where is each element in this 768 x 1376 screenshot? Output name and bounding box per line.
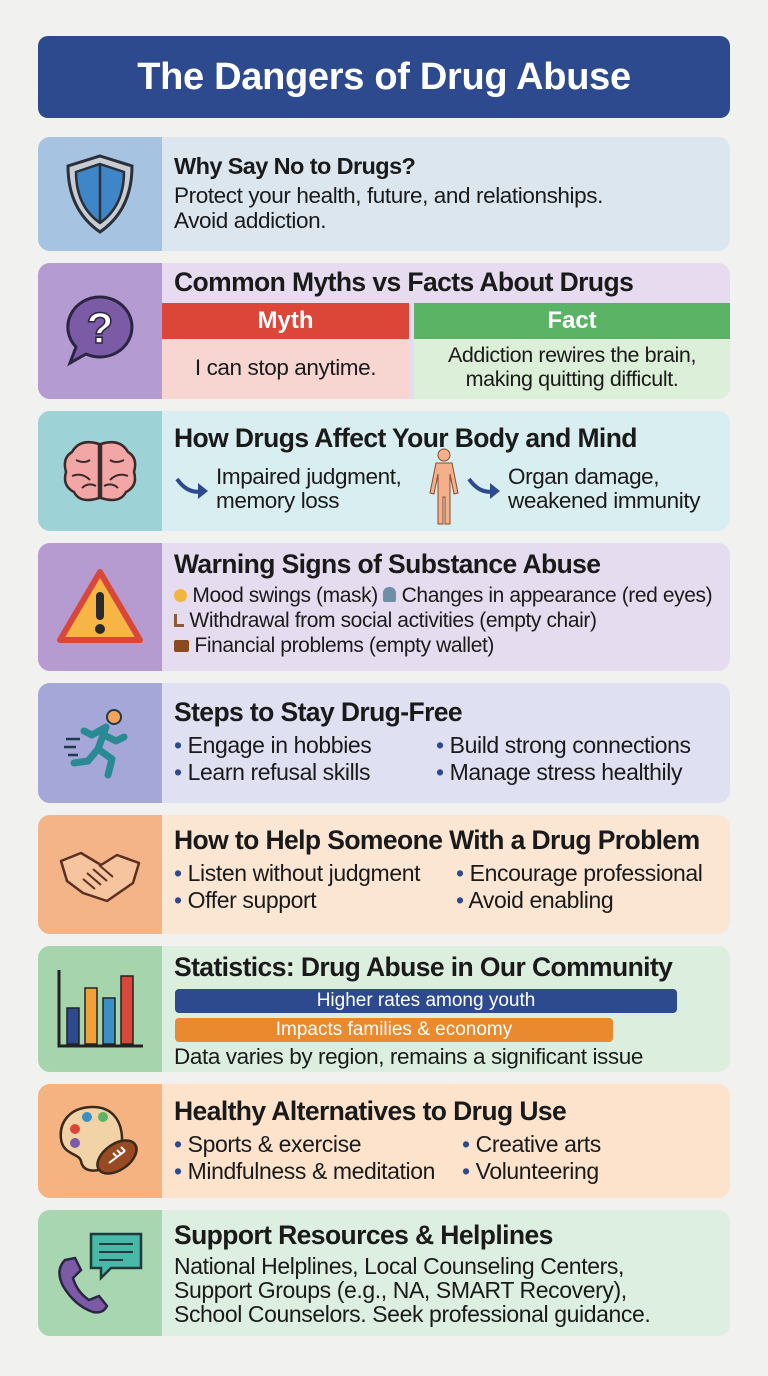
title <box>38 36 730 118</box>
panel: support resources <box>38 1210 730 1336</box>
text: warning signs: Warning Signs of Substance Abuse <box>174 549 600 579</box>
text: why say no: Protect your health, future, and relationships. <box>174 183 603 208</box>
table: fact <box>414 303 730 399</box>
text: help: • Offer support <box>174 887 316 913</box>
text: why say no <box>174 153 603 233</box>
heading: statistics: Statistics: Drug Abuse in Our Community <box>174 952 672 982</box>
icon: brain <box>64 440 136 502</box>
bar: youth <box>175 989 677 1013</box>
text: data varies: Data varies by region, remains a significant issue <box>174 1044 643 1069</box>
text: help: • Listen without judgment <box>174 860 420 886</box>
text: alternatives: • Creative arts <box>462 1131 601 1157</box>
text: warning signs: Mood swings (mask) Changes in appearance (red eyes) <box>192 584 712 607</box>
text: alternatives: • Sports & exercise <box>174 1131 361 1157</box>
table: myth <box>162 303 409 399</box>
heading: myths: Common Myths vs Facts About Drugs <box>174 267 633 297</box>
table: myth: Myth <box>258 307 314 334</box>
text: alternatives: Healthy Alternatives to Drug Use <box>174 1096 566 1126</box>
panel: help someone <box>38 815 730 934</box>
text: steps: • Learn refusal skills <box>174 759 370 785</box>
icon: question bubble <box>66 296 134 366</box>
panel: statistics <box>38 946 730 1072</box>
icon: handshake <box>60 852 140 902</box>
icon: warning triangle <box>57 569 143 643</box>
text: warning signs <box>174 549 712 657</box>
bar: families: Impacts families & economy <box>276 1019 512 1040</box>
panel: why say no <box>38 137 730 251</box>
text: help <box>174 825 703 913</box>
text: warning signs: Financial problems (empty wallet) <box>194 634 494 657</box>
title: The Dangers of Drug Abuse <box>137 56 631 98</box>
text: alternatives <box>174 1096 601 1184</box>
text: why say no: Why Say No to Drugs? <box>174 153 415 179</box>
panel: body and mind: Organ damage, <box>508 464 659 489</box>
panel: alternatives <box>38 1084 730 1198</box>
text: help: • Avoid enabling <box>456 887 613 913</box>
text: help: How to Help Someone With a Drug Problem <box>174 825 700 855</box>
text: support: Support Groups (e.g., NA, SMART Recovery), <box>174 1277 627 1303</box>
panel: body and mind: Impaired judgment, <box>216 464 401 489</box>
text: steps: • Engage in hobbies <box>174 732 371 758</box>
panel: body and mind: weakened immunity <box>508 488 700 513</box>
table: fact: Fact <box>547 307 597 334</box>
icon: body figure <box>429 448 459 524</box>
text: warning signs: Withdrawal from social activities (empty chair) <box>189 609 597 632</box>
icon: palette and football <box>59 1106 138 1175</box>
icon: shield <box>66 154 134 234</box>
text: alternatives: • Volunteering <box>462 1158 599 1184</box>
text: support: School Counselors. Seek professional guidance. <box>174 1301 650 1327</box>
panel: body and mind <box>38 411 730 531</box>
text: support: National Helplines, Local Counseling Centers, <box>174 1253 624 1279</box>
panel: body and mind: memory loss <box>216 488 339 513</box>
text: steps: Steps to Stay Drug-Free <box>174 697 462 727</box>
icon: question bubble: ? <box>87 304 113 353</box>
text: steps: • Build strong connections <box>436 732 691 758</box>
panel: warning signs <box>38 543 730 671</box>
icon: runner <box>64 709 128 778</box>
panel: steps <box>38 683 730 803</box>
effect: body <box>467 464 700 513</box>
text: alternatives: • Mindfulness & meditation <box>174 1158 435 1184</box>
table: myth: I can stop anytime. <box>195 355 376 380</box>
effect: brain <box>175 464 401 513</box>
text: steps <box>174 697 691 785</box>
text: help: • Encourage professional <box>456 860 703 886</box>
text: support <box>174 1220 650 1327</box>
icon: phone and chat <box>58 1232 142 1314</box>
text: steps: • Manage stress healthily <box>436 759 682 785</box>
heading: body: How Drugs Affect Your Body and Mind <box>174 423 637 453</box>
bar: families <box>175 1018 613 1042</box>
bar: youth: Higher rates among youth <box>317 990 535 1011</box>
text: why say no: Avoid addiction. <box>174 208 326 233</box>
table: fact: making quitting difficult. <box>466 367 678 391</box>
text: support: Support Resources & Helplines <box>174 1220 553 1250</box>
panel: myths vs facts <box>38 263 730 399</box>
table: fact: Addiction rewires the brain, <box>448 343 696 367</box>
icon: bar chart <box>58 970 143 1048</box>
